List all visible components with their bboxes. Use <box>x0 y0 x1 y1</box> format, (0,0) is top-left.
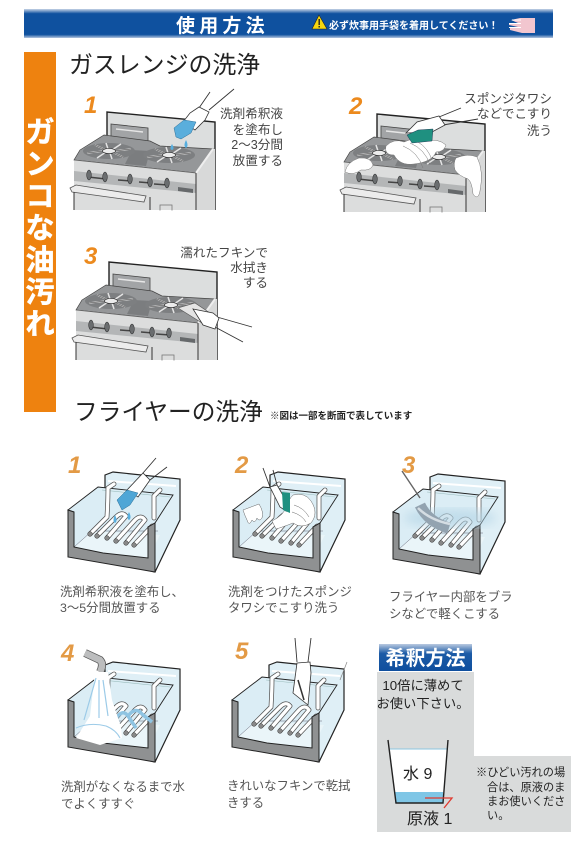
caption <box>180 246 268 290</box>
brush <box>402 471 450 528</box>
caption: 放置する <box>233 154 283 168</box>
panel: gas range step 1: 1 <box>84 92 97 119</box>
glove warning text: 必ず炊事用手袋を着用してください！ <box>329 19 498 32</box>
caption <box>464 92 552 138</box>
dilution instruction: 10倍に薄めて <box>382 678 464 693</box>
caption: する <box>243 276 268 290</box>
panel: fryer step 1: 1 <box>68 452 81 479</box>
side banner: stubborn grease: ガ <box>25 116 55 149</box>
caption: 洗剤希釈液を塗布し、 <box>60 584 184 599</box>
caption <box>61 779 186 811</box>
side banner: stubborn grease <box>24 52 56 412</box>
panel: fryer step 3 <box>389 452 513 621</box>
caption: シなどで軽くこする <box>389 607 500 621</box>
dilution instruction: お使い下さい。 <box>376 695 470 711</box>
dilution header: 希釈方法 <box>386 647 466 670</box>
caption <box>220 107 283 168</box>
heading: gas range cleaning: ガスレンジの洗浄 <box>69 52 260 79</box>
panel: gas range step 2: 2 <box>348 93 363 120</box>
caption: 洗剤をつけたスポンジ <box>228 585 352 599</box>
panel: fryer step 1 <box>60 452 184 615</box>
caption: 水拭き <box>230 261 268 275</box>
panel: fryer step 5 <box>227 638 351 810</box>
side banner: stubborn grease: な <box>25 213 55 245</box>
caption: でよくすすぐ <box>61 797 135 811</box>
caption: きする <box>227 796 264 810</box>
hand with sponge <box>170 89 234 150</box>
note: まお使いくださ <box>487 794 565 808</box>
note: 合は、原液のま <box>487 781 565 794</box>
caption: タワシでこすり洗う <box>228 601 339 615</box>
note <box>476 766 565 822</box>
heading: usage: 使用方法 <box>176 14 269 37</box>
panel: fryer step 4: 4 <box>60 640 74 667</box>
dilution instruction <box>376 678 470 711</box>
caption: 3～5分間放置する <box>60 600 161 615</box>
hand with green sponge <box>263 468 290 513</box>
panel: fryer step 2 <box>228 452 352 615</box>
section drawing note: ※図は一部を断面で表しています <box>270 410 412 422</box>
panel: gas range step 2 <box>330 92 552 216</box>
caption: 濡れたフキンで <box>180 246 268 260</box>
panel: dilution method <box>376 644 571 832</box>
hand with cloth <box>293 638 311 705</box>
caption: 洗剤がなくなるまで水 <box>61 779 186 794</box>
panel: gas range step 1 <box>60 89 283 214</box>
header bar <box>24 9 553 38</box>
note: い。 <box>487 810 509 822</box>
caption: 2～3分間 <box>231 138 283 152</box>
side banner: stubborn grease: 汚 <box>25 276 55 309</box>
foam <box>243 494 315 529</box>
tap <box>85 653 102 672</box>
caption: 洗剤希釈液 <box>220 107 283 121</box>
caption: を塗布し <box>233 123 283 137</box>
caption: 洗う <box>527 124 552 138</box>
panel: gas range step 3: 3 <box>84 243 98 270</box>
glass diagram: 原液 1 <box>407 810 452 828</box>
panel: fryer step 2: 2 <box>234 452 249 479</box>
panel: fryer step 5: 5 <box>235 638 249 665</box>
glass diagram: 水 9 <box>403 765 432 783</box>
hand with blue sponge <box>114 458 167 523</box>
caption: スポンジタワシ <box>464 92 552 106</box>
caption: などでこすり <box>477 107 552 121</box>
icon: warning triangle <box>312 15 327 29</box>
panel: fryer step 4 <box>60 640 186 811</box>
hand with green sponge <box>406 108 478 143</box>
caption <box>228 585 352 615</box>
icon: gloved hand <box>509 18 535 33</box>
foam <box>345 139 481 197</box>
heading: fryer cleaning: フライヤーの洗浄 <box>74 399 263 426</box>
panel: gas range step 3 <box>62 243 268 364</box>
side banner: stubborn grease: コ <box>25 181 55 213</box>
note: ※ひどい汚れの場 <box>476 766 565 779</box>
side banner: stubborn grease: 油 <box>25 244 55 277</box>
caption: フライヤー内部をブラ <box>389 589 513 604</box>
hand with cloth <box>178 303 252 342</box>
caption <box>389 589 513 621</box>
glass diagram <box>388 740 452 828</box>
caption <box>60 584 184 615</box>
water stream <box>76 672 152 745</box>
side banner: stubborn grease: れ <box>25 309 55 341</box>
panel: fryer step 3: 3 <box>402 452 416 479</box>
caption <box>227 779 351 810</box>
caption: きれいなフキンで乾拭 <box>227 779 351 793</box>
side banner: stubborn grease: ン <box>25 149 55 181</box>
